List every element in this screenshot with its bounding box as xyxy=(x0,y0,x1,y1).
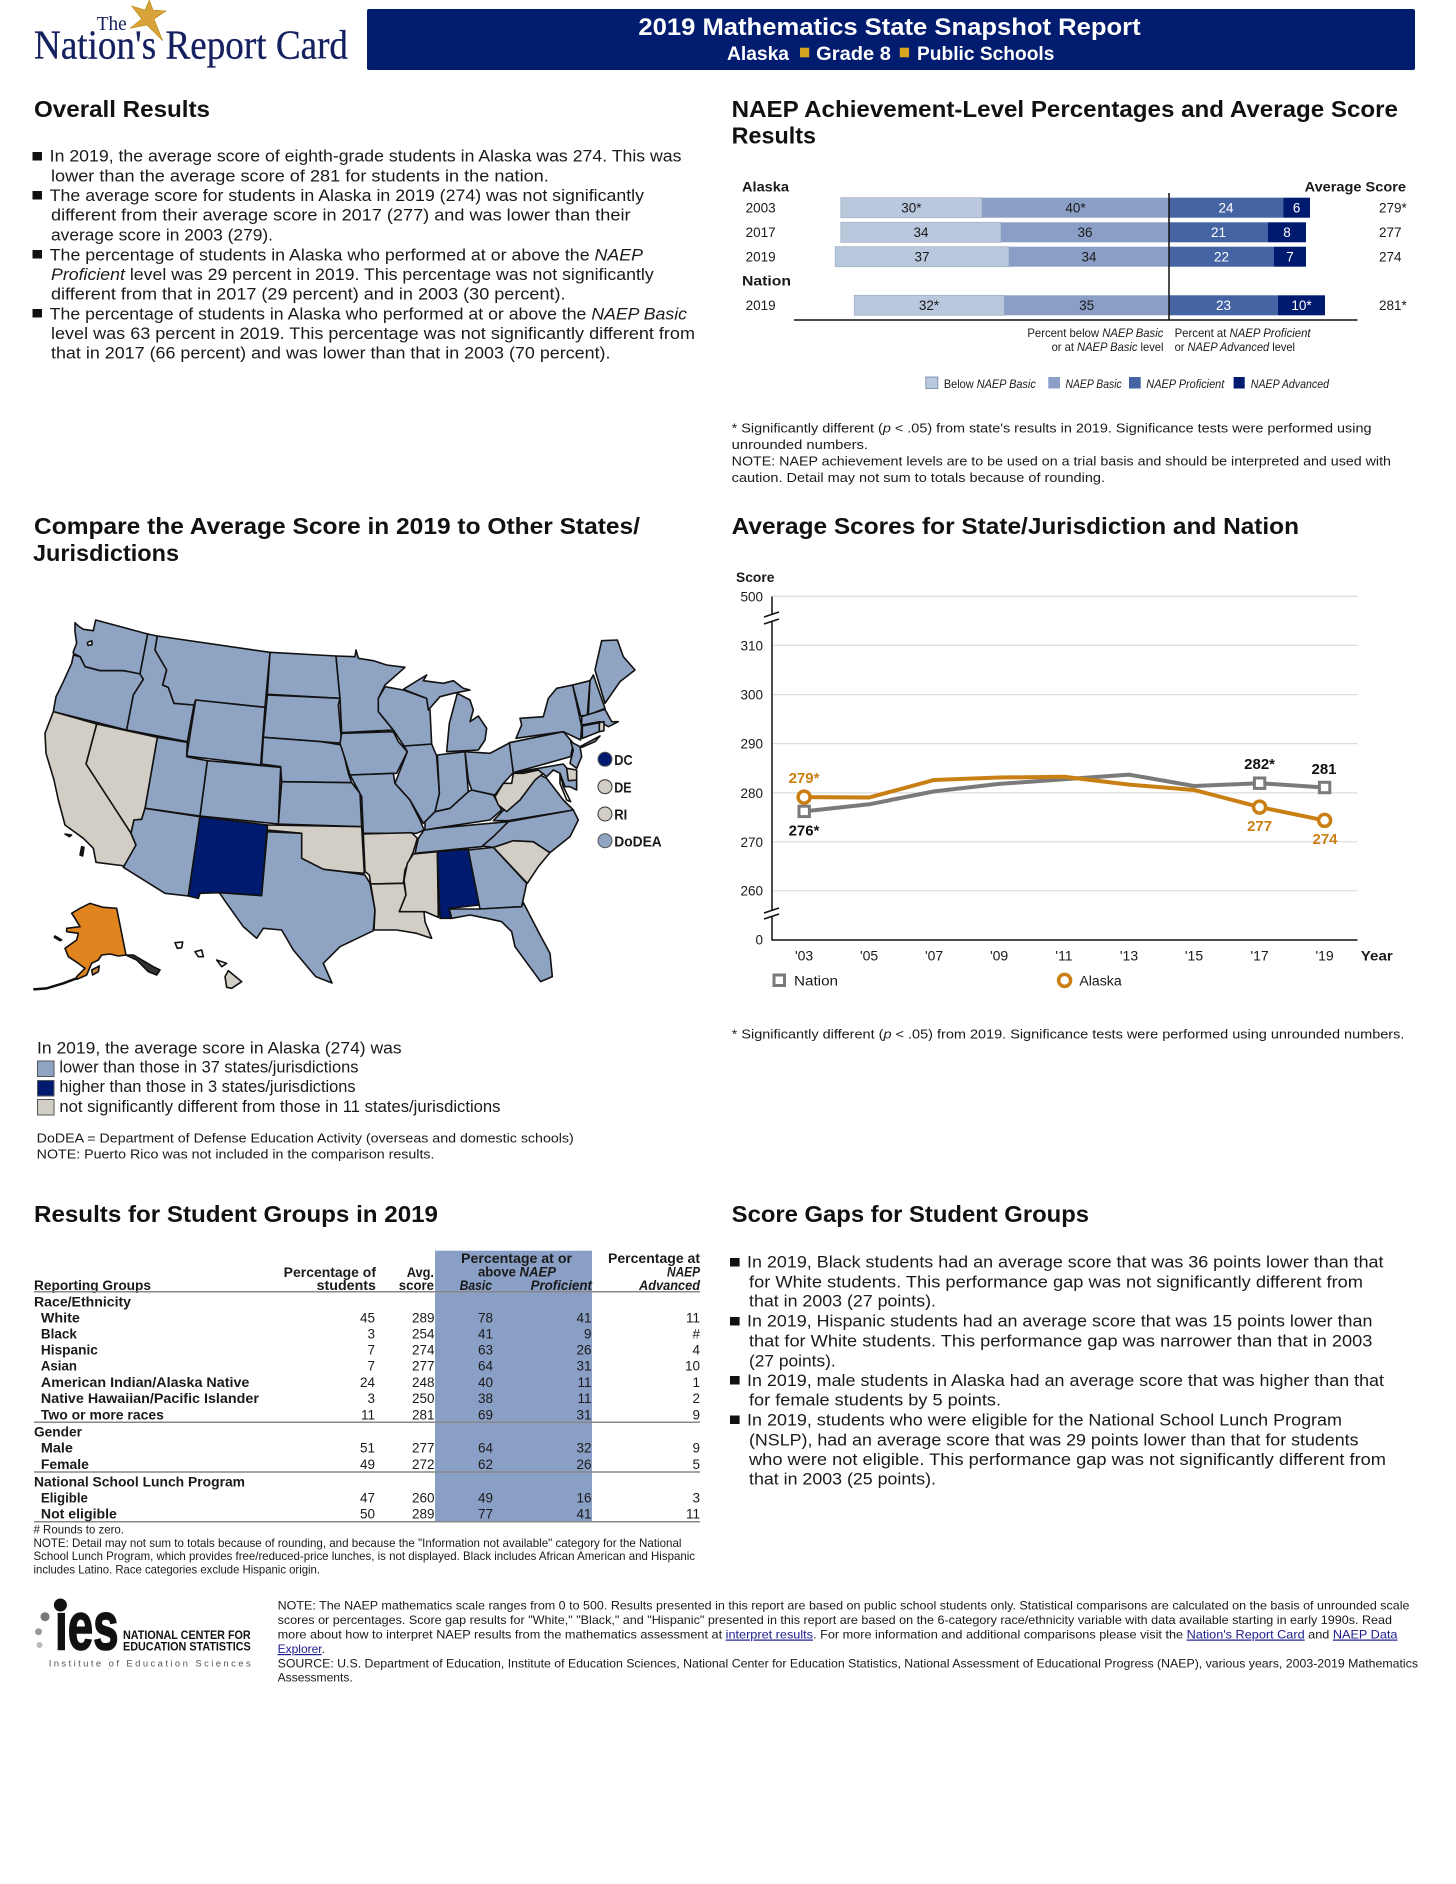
legend: achievement levels: NAEP Advanced xyxy=(1251,377,1329,391)
table: student group results: Basic xyxy=(460,1278,492,1293)
bar: Alaska 2019: 37 xyxy=(914,250,930,264)
map key: DC, DE, RI, DoDEA: DoDEA xyxy=(614,833,662,850)
bar: Alaska 2017: 8 xyxy=(1283,225,1291,240)
column: at or above Basic: 38 xyxy=(478,1391,493,1406)
column: percentage of students: 47 xyxy=(360,1491,375,1506)
bar chart: achievement levels: 2019 xyxy=(746,298,776,313)
logo: IES National Center for Education Statistics: Institute of Education Sciences xyxy=(49,1658,251,1670)
column: at or above Basic: 64 xyxy=(478,1359,493,1374)
line chart: average scores: '17 xyxy=(1250,948,1269,964)
bar chart: achievement levels: 274 xyxy=(1379,250,1402,264)
table row labels: Black xyxy=(41,1326,77,1341)
map: United States comparison xyxy=(33,620,635,989)
table row labels: Two or more races xyxy=(41,1407,164,1422)
table: student group results: Percentage at or xyxy=(461,1251,573,1266)
text block: overall results bullets: average score in 2003 (279). xyxy=(51,226,273,244)
bar chart: achievement levels: Alaska xyxy=(742,180,790,194)
series: Alaska xyxy=(798,777,1331,826)
column: average score xyxy=(412,1310,435,1522)
map key: DC, DE, RI, DoDEA: DE xyxy=(614,779,632,796)
note: DoDEA and Puerto Rico: DoDEA = Department of Defense Education Activity (overseas and domestic schools) xyxy=(37,1130,574,1146)
map key: DC, DE, RI, DoDEA: RI xyxy=(614,807,627,824)
legend: achievement levels: NAEP Proficient xyxy=(1146,377,1225,391)
table row labels: Race/Ethnicity xyxy=(34,1295,132,1310)
note: DoDEA and Puerto Rico: NOTE: Puerto Rico was not included in the comparison results. xyxy=(37,1146,434,1162)
column: percentage of students xyxy=(360,1310,375,1522)
text block: overall results bullets: that in 2017 (66 percent) and was lower than that in 2003 (70 percent). xyxy=(51,345,610,363)
chart legend xyxy=(774,974,1122,988)
column: average score: 248 xyxy=(412,1375,434,1390)
column: percentage of students: 24 xyxy=(360,1375,375,1390)
table: student group results xyxy=(34,1251,701,1522)
column: at or above Proficient: 31 xyxy=(576,1359,592,1374)
table row labels: Gender xyxy=(34,1424,83,1439)
column: at or above Proficient: 41 xyxy=(576,1310,592,1325)
bar chart: achievement levels: 277 xyxy=(1379,225,1402,240)
header banner: Public Schools xyxy=(917,44,1054,65)
footnote: student groups table: NOTE: Detail may not sum to totals because of rounding, and because the "Information not available" category for the National xyxy=(34,1536,682,1550)
line chart: average scores: 0 xyxy=(755,932,763,948)
text block: overall results bullets: The percentage of students in Alaska who performed at or above the NAEP xyxy=(50,246,643,264)
column: at Advanced: 2 xyxy=(692,1391,700,1406)
bar chart: achievement levels: or at NAEP Basic level xyxy=(1052,340,1164,354)
logo: IES National Center for Education Statistics: EDUCATION STATISTICS xyxy=(123,1640,251,1654)
header banner: 2019 Mathematics State Snapshot Report xyxy=(638,14,1141,41)
column: percentage of students: 3 xyxy=(367,1391,375,1406)
footer note and source: Assessments. xyxy=(278,1670,353,1684)
bar: Alaska 2019: 34 xyxy=(1081,250,1097,264)
column: at or above Basic: 62 xyxy=(478,1457,493,1472)
footer note and source: NOTE: The NAEP mathematics scale ranges from 0 to 500. Results presented in this report are based on public school students only. Statistical comparisons are calculated on the basis of unrounded scale xyxy=(278,1598,1410,1612)
column: average score: 277 xyxy=(412,1441,434,1456)
line chart: average scores: '15 xyxy=(1185,948,1203,964)
line chart: average scores: 310 xyxy=(740,638,763,653)
column: at Advanced: 4 xyxy=(692,1343,700,1358)
line chart: average scores: '05 xyxy=(860,948,878,964)
column: at or above Proficient: 26 xyxy=(576,1343,592,1358)
line chart: average scores: 280 xyxy=(740,786,763,801)
map key: DC, DE, RI, DoDEA: DC xyxy=(614,752,633,769)
column: at or above Proficient: 11 xyxy=(577,1391,592,1406)
column: percentage of students: 49 xyxy=(360,1457,375,1472)
column: at Advanced: 3 xyxy=(692,1491,700,1506)
column: average score: 274 xyxy=(412,1343,435,1358)
table: student group results: students xyxy=(317,1278,376,1293)
text block: score gaps bullets: In 2019, students who were eligible for the National School Lunch Program xyxy=(747,1411,1342,1429)
map legend: higher than those in 3 states/jurisdictions xyxy=(59,1078,356,1096)
column: at or above Proficient: 26 xyxy=(576,1457,592,1472)
column: average score: 289 xyxy=(412,1310,434,1325)
line chart: average scores: 274 xyxy=(1312,831,1338,848)
heading: NAEP Achievement-Level Percentages: Results xyxy=(732,122,816,148)
table row labels: White xyxy=(41,1310,80,1325)
bar chart: achievement levels: 279* xyxy=(1379,200,1408,216)
text block: score gaps bullets: In 2019, male students in Alaska had an average score that was higher than that xyxy=(747,1372,1384,1390)
text block: overall results bullets: different from their average score in 2017 (277) and was lower than their xyxy=(51,207,631,225)
bar: Alaska 2017: 21 xyxy=(1211,225,1226,240)
heading: NAEP Achievement-Level Percentages xyxy=(732,96,1398,148)
bar: Alaska 2019: 7 xyxy=(1286,250,1294,264)
table row labels: National School Lunch Program xyxy=(34,1474,245,1489)
footer note and source xyxy=(278,1598,1418,1684)
bar: Alaska 2003: 40* xyxy=(1065,200,1086,216)
map legend: not significantly different from those in 11 states/jurisdictions xyxy=(59,1098,501,1116)
legend: achievement levels: Below NAEP Basic xyxy=(944,377,1036,391)
text block: score gaps bullets: that in 2003 (25 points). xyxy=(749,1471,936,1489)
table: student group results: Reporting Groups xyxy=(34,1278,151,1293)
bar chart: achievement levels: Percent at NAEP Proficient xyxy=(1175,326,1311,340)
column: at or above Proficient: 11 xyxy=(577,1375,592,1390)
table: student group results: above NAEP xyxy=(478,1265,557,1280)
column: at or above Proficient: 16 xyxy=(576,1491,592,1506)
bar: Alaska 2017 xyxy=(841,222,1306,242)
column: at Advanced: 10 xyxy=(685,1359,700,1374)
footnote: achievement levels: unrounded numbers. xyxy=(732,437,868,452)
column: at or above Proficient: 41 xyxy=(576,1507,592,1522)
footer note and source: Explorer. xyxy=(278,1642,325,1656)
note: DoDEA and Puerto Rico xyxy=(37,1130,574,1162)
column: at Advanced: 11 xyxy=(686,1507,700,1522)
line chart: average scores: '07 xyxy=(925,948,943,964)
bar chart: achievement levels: Percent below NAEP Basic xyxy=(1027,326,1163,340)
legend: achievement levels: NAEP Basic xyxy=(1066,377,1122,391)
series: Nation xyxy=(799,775,1330,817)
logo: The Nation's Report Card: The xyxy=(97,13,127,35)
heading: Results for Student Groups: Results for Student Groups in 2019 xyxy=(34,1201,438,1227)
line chart: average scores: 270 xyxy=(740,835,763,850)
text block: score gaps bullets: that in 2003 (27 points). xyxy=(749,1293,936,1311)
bar: Nation 2019: 10* xyxy=(1291,298,1312,313)
footnote: student groups table: # Rounds to zero. xyxy=(34,1522,124,1536)
heading: Average Scores: Average Scores for State/Jurisdiction and Nation xyxy=(732,513,1299,539)
text block: score gaps bullets: that for White students. This performance gap was narrower than that in 2003 xyxy=(749,1332,1372,1350)
text block: score gaps bullets: In 2019, Black students had an average score that was 36 points lower than that xyxy=(747,1254,1384,1272)
line chart: average scores: Score xyxy=(736,570,775,585)
bar: Alaska 2003: 6 xyxy=(1293,200,1300,216)
table row labels: American Indian/Alaska Native xyxy=(41,1375,250,1390)
table row labels: Male xyxy=(41,1441,73,1456)
map legend: lower than those in 37 states/jurisdictions xyxy=(59,1058,358,1076)
table row labels: Native Hawaiian/Pacific Islander xyxy=(41,1391,260,1406)
table: student group results: Advanced xyxy=(638,1278,701,1293)
column: average score: 281 xyxy=(412,1407,434,1422)
line chart: average scores: '09 xyxy=(990,948,1008,964)
header banner xyxy=(367,9,1415,70)
text block: score gaps bullets: for White students. This performance gap was not significantly different from xyxy=(749,1273,1363,1291)
footnote: student groups table: School Lunch Program, which provides free/reduced-price lunches, is not displayed. Black includes African American and Hispanic xyxy=(34,1549,695,1563)
map legend: In 2019, the average score in Alaska (274) was xyxy=(37,1040,402,1058)
column: at Advanced xyxy=(685,1310,700,1522)
line chart: average scores: 282* xyxy=(1244,756,1275,773)
footer note and source: more about how to interpret NAEP results from the mathematics assessment at interpret results . For more information and additional comparisons please visit the Nation's Report Card and NAEP Data xyxy=(278,1628,1398,1642)
logo: The Nation's Report Card: Nation's Report Card xyxy=(34,21,348,67)
heading: Score Gaps: Score Gaps for Student Groups xyxy=(732,1201,1089,1227)
line chart: average scores: 290 xyxy=(740,737,763,752)
line chart: average scores: 276* xyxy=(789,822,820,840)
footnote: student groups table: includes Latino. Race categories exclude Hispanic origin. xyxy=(34,1562,320,1576)
column: average score: 260 xyxy=(412,1491,434,1506)
logo: IES National Center for Education Statistics xyxy=(35,1588,251,1670)
bar chart: achievement levels: Nation xyxy=(742,274,791,288)
bar: Nation 2019: 32* xyxy=(919,298,940,313)
footnote: line chart: * Significantly different ( p < .05) from 2019. Significance tests were performed using unrounded numbers. xyxy=(732,1026,1404,1042)
column: at or above Proficient: 31 xyxy=(576,1407,592,1422)
column: percentage of students: 7 xyxy=(367,1359,375,1374)
table: student group results: Percentage at xyxy=(608,1251,701,1266)
heading: Overall Results: Overall Results xyxy=(34,96,210,122)
column: average score: 272 xyxy=(412,1457,434,1472)
column: at Advanced: 1 xyxy=(692,1375,700,1390)
text block: overall results bullets: different from that in 2017 (29 percent) and in 2003 (30 percent). xyxy=(51,286,566,304)
column: at or above Proficient: 32 xyxy=(576,1441,592,1456)
line chart: average scores: 260 xyxy=(740,884,763,899)
header banner: Alaska xyxy=(727,44,789,65)
heading: Compare the Average Score xyxy=(33,513,641,566)
column: at or above Basic: 77 xyxy=(478,1507,493,1522)
text block: overall results bullets xyxy=(32,148,695,363)
column: at or above Basic: 41 xyxy=(478,1326,493,1341)
text block: overall results bullets: The percentage of students in Alaska who performed at or above the NAEP Basic xyxy=(50,305,688,323)
Alaska inset xyxy=(65,903,126,979)
bar: Alaska 2017: 34 xyxy=(913,225,929,240)
text block: overall results bullets: level was 63 percent in 2019. This percentage was not significantly different from xyxy=(51,325,695,343)
bar: Nation 2019 xyxy=(854,295,1325,315)
bar chart: achievement levels: 2003 xyxy=(746,200,776,216)
line chart: average scores: Year xyxy=(1361,948,1394,964)
chart legend: Nation xyxy=(794,974,838,988)
bar: Alaska 2003: 30* xyxy=(901,200,922,216)
footnote: achievement levels xyxy=(732,420,1391,485)
table: student group results: NAEP xyxy=(667,1265,701,1280)
legend: achievement levels xyxy=(926,377,1329,391)
column: at Advanced: 9 xyxy=(692,1407,700,1422)
bar: Alaska 2019: 22 xyxy=(1214,250,1229,264)
table: student group results: Avg. xyxy=(407,1265,434,1280)
footnote: achievement levels: caution. Detail may not sum to totals because of rounding. xyxy=(732,470,1105,485)
line chart: average scores: 281 xyxy=(1311,761,1337,778)
text block: score gaps bullets: (NSLP), had an average score that was 29 points lower than that for students xyxy=(749,1431,1358,1449)
line chart: average scores: '19 xyxy=(1315,948,1334,964)
bar chart: achievement levels: 2019 xyxy=(746,250,776,264)
table row labels: Asian xyxy=(41,1359,77,1374)
column: at or above Basic: 69 xyxy=(478,1407,493,1422)
table: student group results: score xyxy=(399,1278,434,1293)
map legend xyxy=(37,1040,500,1116)
table: student group results: Percentage of xyxy=(284,1265,377,1280)
column: average score: 250 xyxy=(412,1391,434,1406)
text block: score gaps bullets: (27 points). xyxy=(749,1352,836,1370)
column: at Advanced: 11 xyxy=(686,1310,700,1325)
heading: Compare the Average Score: Jurisdictions xyxy=(33,540,179,566)
column: at or above Basic: 78 xyxy=(478,1310,493,1325)
bar: Alaska 2017: 36 xyxy=(1077,225,1093,240)
column: average score: 289 xyxy=(412,1507,434,1522)
footnote: achievement levels: * Significantly different ( p < .05) from state's results in 2019. Significance tests were performed using xyxy=(732,420,1372,436)
bar chart: achievement levels: Average Score xyxy=(1305,180,1407,194)
text block: score gaps bullets xyxy=(730,1254,1386,1489)
heading: Compare the Average Score: Compare the Average Score in 2019 to Other States/ xyxy=(34,513,641,539)
logo: IES National Center for Education Statistics: ies xyxy=(55,1588,118,1664)
column: at Advanced: 5 xyxy=(692,1457,700,1472)
heading: NAEP Achievement-Level Percentages: NAEP Achievement-Level Percentages and Average Score xyxy=(732,96,1398,122)
bar: Alaska 2003 xyxy=(841,198,1310,218)
column: average score: 277 xyxy=(412,1359,434,1374)
table row labels: Eligible xyxy=(41,1491,88,1506)
line chart: average scores: 279* xyxy=(789,770,820,787)
table row labels: Not eligible xyxy=(41,1507,117,1522)
text block: score gaps bullets: who were not eligible. This performance gap was not significantly different from xyxy=(748,1451,1386,1469)
chart legend: Alaska xyxy=(1079,974,1122,988)
column: percentage of students: 51 xyxy=(360,1441,375,1456)
bar chart: achievement levels: or NAEP Advanced level xyxy=(1175,340,1295,354)
bar: Alaska 2019 xyxy=(835,247,1306,267)
bar chart: achievement levels: 281* xyxy=(1379,298,1408,313)
column: percentage of students: 45 xyxy=(360,1310,375,1325)
column: at or above Basic xyxy=(478,1310,493,1522)
line chart: average scores: '13 xyxy=(1120,948,1138,964)
column: percentage of students: 50 xyxy=(360,1507,375,1522)
footnote: student groups table xyxy=(34,1522,695,1576)
Hawaii inset xyxy=(225,971,242,988)
text block: score gaps bullets: In 2019, Hispanic students had an average score that was 15 points lower than xyxy=(747,1313,1372,1331)
text block: overall results bullets: In 2019, the average score of eighth-grade students in Alaska was 274. This was xyxy=(50,148,681,166)
column: percentage of students: 7 xyxy=(367,1343,375,1358)
text block: overall results bullets: The average score for students in Alaska in 2019 (274) was not significantly xyxy=(50,187,645,205)
logo: IES National Center for Education Statistics: NATIONAL CENTER FOR xyxy=(123,1628,251,1642)
column: at Advanced: # xyxy=(692,1326,700,1341)
column: at or above Basic: 49 xyxy=(478,1491,493,1506)
footer note and source: SOURCE: U.S. Department of Education, Institute of Education Sciences, National Center for Education Statistics, National Assessment of Educational Progress (NAEP), various years, 2003-2019 Mathematics xyxy=(278,1656,1418,1670)
table row labels: Hispanic xyxy=(41,1343,98,1358)
California islands xyxy=(65,834,72,837)
table: student group results: Proficient xyxy=(531,1278,592,1293)
bar: Alaska 2003: 24 xyxy=(1218,200,1234,216)
table row labels xyxy=(34,1295,260,1522)
line chart: average scores: 500 xyxy=(740,589,763,604)
text block: overall results bullets: lower than the average score of 281 for students in the nation. xyxy=(51,167,549,185)
column: average score: 254 xyxy=(412,1326,435,1341)
footer note and source: scores or percentages. Score gap results for "White," "Black," and "Hispanic" presented in this report are based on the 6-category race/ethnicity variable with data available starting in early 1990s. Read xyxy=(278,1613,1392,1627)
bar chart: achievement levels: 2017 xyxy=(746,225,776,240)
column: at Advanced: 9 xyxy=(692,1441,700,1456)
line chart: average scores: '03 xyxy=(795,948,813,964)
text block: overall results bullets: Proficient level was 29 percent in 2019. This percentage was not significantly xyxy=(51,266,654,284)
header banner: Grade 8 xyxy=(816,44,891,65)
column: at or above Proficient xyxy=(576,1310,592,1522)
logo: The Nation's Report Card xyxy=(34,0,348,67)
line chart: average scores: '11 xyxy=(1055,948,1073,964)
line chart: average scores: 300 xyxy=(740,688,763,703)
bar: Nation 2019: 23 xyxy=(1216,298,1231,313)
text block: score gaps bullets: for female students by 5 points. xyxy=(749,1392,1001,1410)
bar chart: achievement levels xyxy=(742,180,1408,354)
line chart: average scores: 277 xyxy=(1247,818,1272,835)
column: percentage of students: 3 xyxy=(367,1326,375,1341)
footnote: achievement levels: NOTE: NAEP achievement levels are to be used on a trial basis and should be interpreted and used with xyxy=(732,454,1391,468)
column: at or above Basic: 63 xyxy=(478,1343,493,1358)
line chart: average scores xyxy=(736,570,1394,988)
column: at or above Proficient: 9 xyxy=(584,1326,592,1341)
column: at or above Basic: 40 xyxy=(478,1375,493,1390)
table row labels: Female xyxy=(41,1457,89,1472)
column: percentage of students: 11 xyxy=(361,1407,375,1422)
map key: DC, DE, RI, DoDEA xyxy=(598,752,662,850)
bar: Nation 2019: 35 xyxy=(1079,298,1094,313)
column: at or above Basic: 64 xyxy=(478,1441,493,1456)
